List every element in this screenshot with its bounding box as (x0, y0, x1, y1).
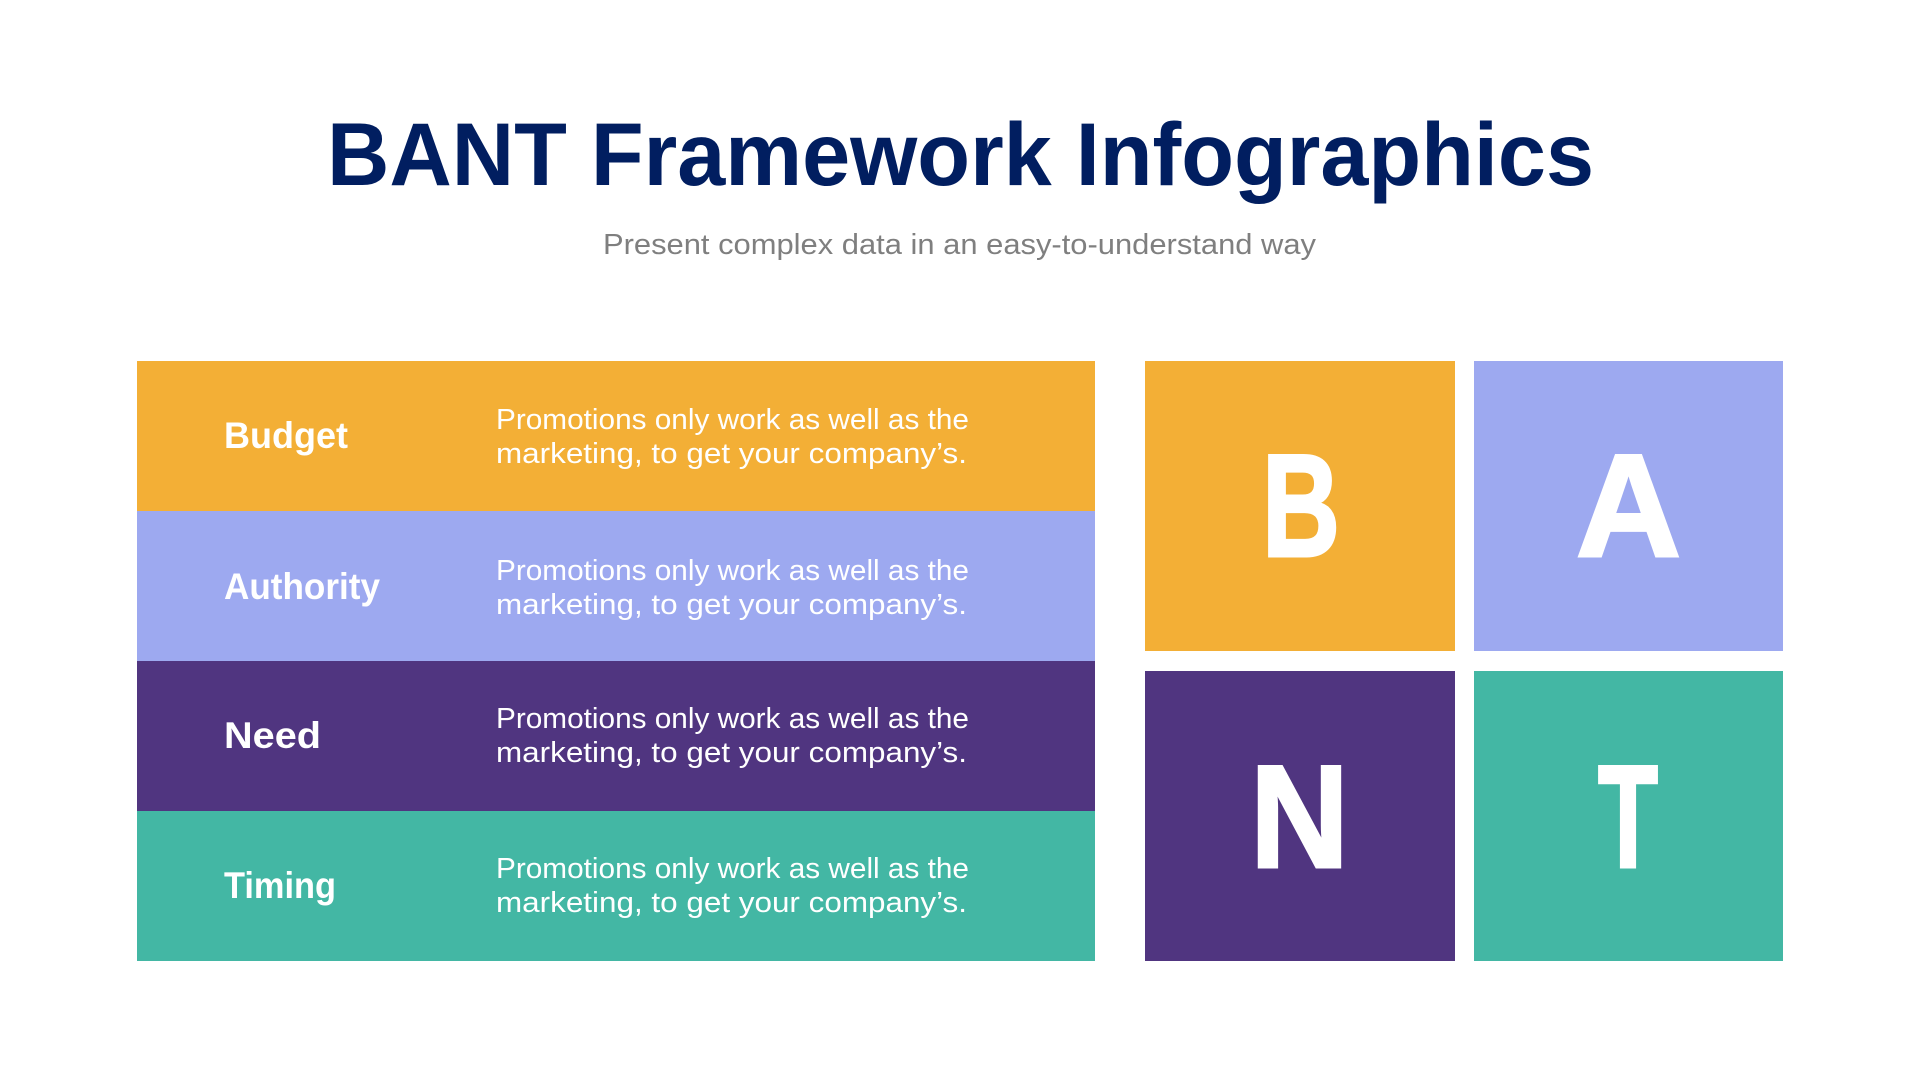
row: Need: marketing, to get your company’s. (496, 737, 967, 769)
row: Authority: Promotions only work as well as the (496, 555, 969, 587)
tile: B: B (1262, 424, 1340, 587)
subtitle: Present complex data in an easy-to-understand way (603, 229, 1317, 261)
row: Timing: Promotions only work as well as the (496, 853, 969, 885)
row: Budget: Budget (224, 415, 348, 456)
panel: BANT letter tiles (1145, 361, 1783, 961)
row: Authority (137, 511, 1095, 661)
tile: N (1145, 671, 1455, 961)
row: Authority: marketing, to get your company’s. (496, 589, 967, 621)
row: Timing: marketing, to get your company’s. (496, 887, 967, 919)
row: Timing (137, 811, 1095, 961)
row: Budget (137, 361, 1095, 511)
tile: T (1474, 671, 1783, 961)
row: Need: Promotions only work as well as the (496, 703, 969, 735)
row: Budget: Promotions only work as well as the (496, 404, 969, 436)
tile: B (1145, 361, 1455, 651)
row: Authority: Authority (224, 566, 380, 607)
row: Budget: marketing, to get your company’s. (496, 438, 967, 470)
row: Timing: Timing (224, 865, 336, 906)
tile: A: A (1576, 424, 1681, 587)
tile: A (1474, 361, 1783, 651)
panel: BANT rows (137, 361, 1095, 961)
tile: T: T (1598, 735, 1658, 898)
tile: N: N (1250, 735, 1349, 898)
row: Need: Need (224, 715, 321, 756)
title: BANT Framework Infographics (327, 104, 1594, 204)
row: Need (137, 661, 1095, 811)
